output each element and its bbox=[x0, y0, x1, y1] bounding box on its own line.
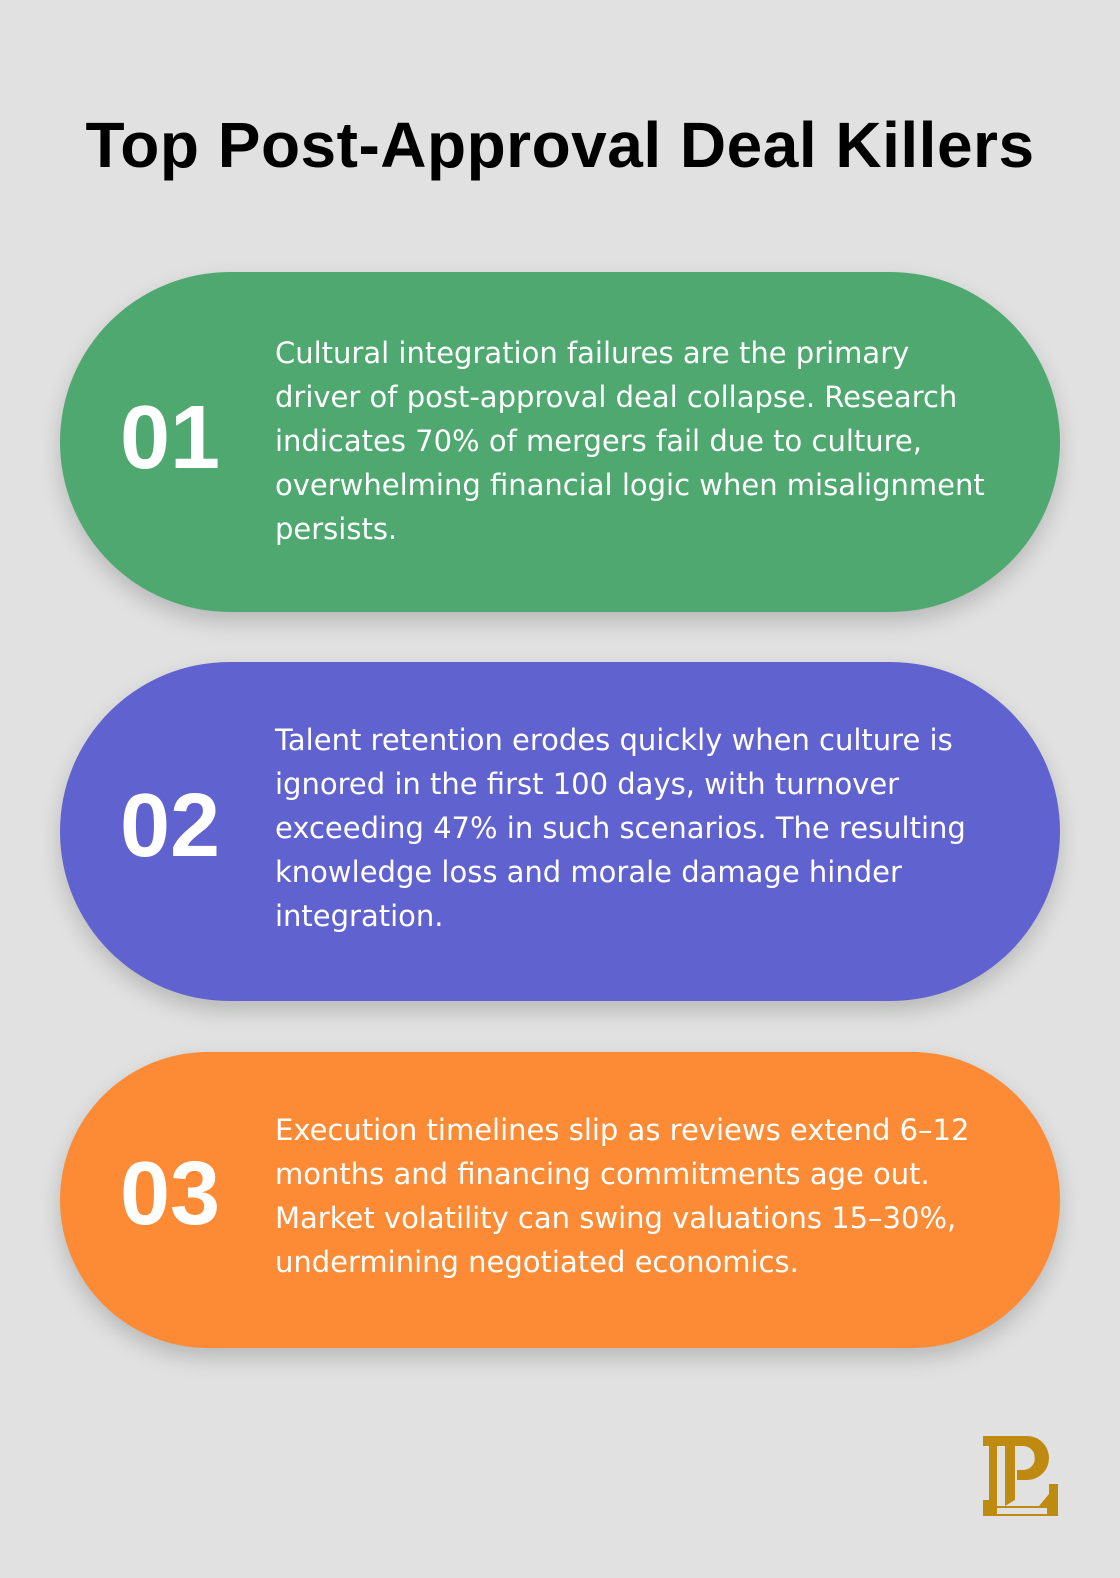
text 02: exceeding 47% in such scenarios. The resulting bbox=[275, 811, 966, 845]
panel: 01 bbox=[60, 272, 1060, 612]
text 03: Market volatility can swing valuations 15–30%, bbox=[275, 1201, 956, 1235]
panel: 03 bbox=[60, 1052, 1060, 1348]
text 01: persists. bbox=[275, 512, 397, 546]
text 01 bbox=[275, 336, 985, 546]
text 01: indicates 70% of mergers fail due to culture, bbox=[275, 424, 922, 458]
text 02: Talent retention erodes quickly when culture is bbox=[275, 723, 953, 757]
text 03: undermining negotiated economics. bbox=[275, 1245, 799, 1279]
title: Top Post-Approval Deal Killers bbox=[85, 109, 1035, 181]
text 01: driver of post-approval deal collapse. Research bbox=[275, 380, 957, 414]
text 01: Cultural integration failures are the primary bbox=[275, 336, 909, 370]
text 02: integration. bbox=[275, 899, 444, 933]
number 03: 03 bbox=[120, 1144, 220, 1244]
panel: 02 bbox=[60, 662, 1060, 1001]
text 03: Execution timelines slip as reviews extend 6–12 bbox=[275, 1113, 969, 1147]
number 01: 01 bbox=[120, 388, 220, 488]
text 02 bbox=[274, 723, 966, 933]
number 02: 02 bbox=[120, 776, 220, 876]
logo bbox=[983, 1436, 1058, 1516]
text 03 bbox=[275, 1113, 969, 1279]
text 02: knowledge loss and morale damage hinder bbox=[275, 855, 902, 889]
text 01: overwhelming financial logic when misalignment bbox=[275, 468, 985, 502]
text 02: ignored in the first 100 days, with turnover bbox=[275, 767, 899, 801]
text 03: months and financing commitments age out. bbox=[275, 1157, 930, 1191]
